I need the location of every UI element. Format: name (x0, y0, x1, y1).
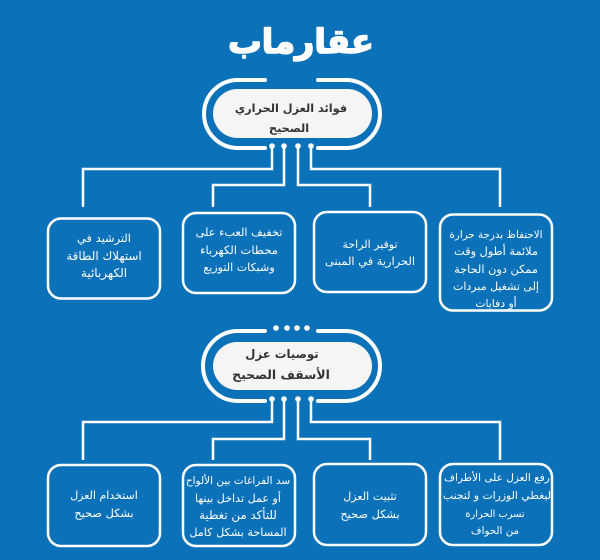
heading pill: recommendations (203, 331, 380, 401)
card: keep temperature: إلى تشغيل مبردات (453, 280, 539, 293)
card: keep temperature (440, 214, 552, 310)
section: roof insulation recommendations (48, 325, 552, 546)
card: rationalize electricity use: الترشيد في (77, 231, 131, 246)
card: reduce load on power stations: تخفيف العبء على (196, 226, 282, 239)
card: fill gaps between boards: سد الفراغات بين الألواح (186, 474, 290, 487)
card: fill gaps between boards (183, 465, 295, 546)
card: use insulation correctly: استخدام العزل (70, 489, 138, 502)
card: raise insulation at edges: رفع العزل على الأطراف (444, 471, 550, 484)
card: keep temperature: ممكن دون الحاجة (454, 263, 538, 277)
card: rationalize electricity use (48, 218, 160, 298)
connectors: recommendations (83, 396, 500, 460)
card: keep temperature: ملائمة أطول وقت (454, 243, 538, 259)
card: thermal comfort: الحرارية في المبنى (325, 254, 415, 269)
section: benefits of insulation (48, 80, 552, 310)
card: fix insulation correctly: بشكل صحيح (340, 508, 400, 521)
separator dots (273, 325, 310, 331)
card: raise insulation at edges: ليغطي الوزرات و لتجنب (443, 489, 551, 502)
card: thermal comfort (314, 212, 426, 292)
card: fix insulation correctly: تثبيت العزل (343, 490, 397, 503)
heading pill: benefits: فوائد العزل الحراري (235, 102, 347, 115)
card: use insulation correctly: بشكل صحيح (74, 507, 134, 520)
card: use insulation correctly (48, 465, 160, 546)
heading pill: recommendations: الأسقف الصحيح (232, 367, 330, 382)
heading pill: benefits (204, 80, 380, 148)
card: reduce load on power stations: محطات الكهرباء (200, 243, 278, 258)
connectors: benefits (83, 143, 500, 207)
card: thermal comfort: توفير الراحة (342, 238, 398, 251)
card: raise insulation at edges: من الحواف (471, 525, 519, 537)
card: raise insulation at edges (440, 464, 552, 545)
card: reduce load on power stations: وشبكات التوزيع (203, 261, 275, 274)
card: rationalize electricity use: الكهربائية (81, 266, 127, 281)
card: fill gaps between boards: للتأكد من تغطية (199, 507, 277, 523)
heading pill: recommendations: توصيات عزل (245, 347, 319, 362)
card: fill gaps between boards: المساحة بشكل كامل (189, 526, 287, 539)
card: rationalize electricity use: استهلاك الطاقة (66, 249, 142, 263)
card: keep temperature: أو دفايات (475, 296, 517, 310)
heading pill: benefits: الصحيح (269, 122, 309, 135)
card: raise insulation at edges: تسرب الحرارة (465, 509, 525, 520)
card: fill gaps between boards: أو عمل تداخل بينها (195, 491, 281, 505)
title: عقارماب (228, 22, 374, 61)
card: reduce load on power stations (183, 213, 295, 293)
card: fix insulation correctly (314, 464, 426, 545)
card: keep temperature: الاحتفاظ بدرجة حرارة (449, 229, 543, 241)
